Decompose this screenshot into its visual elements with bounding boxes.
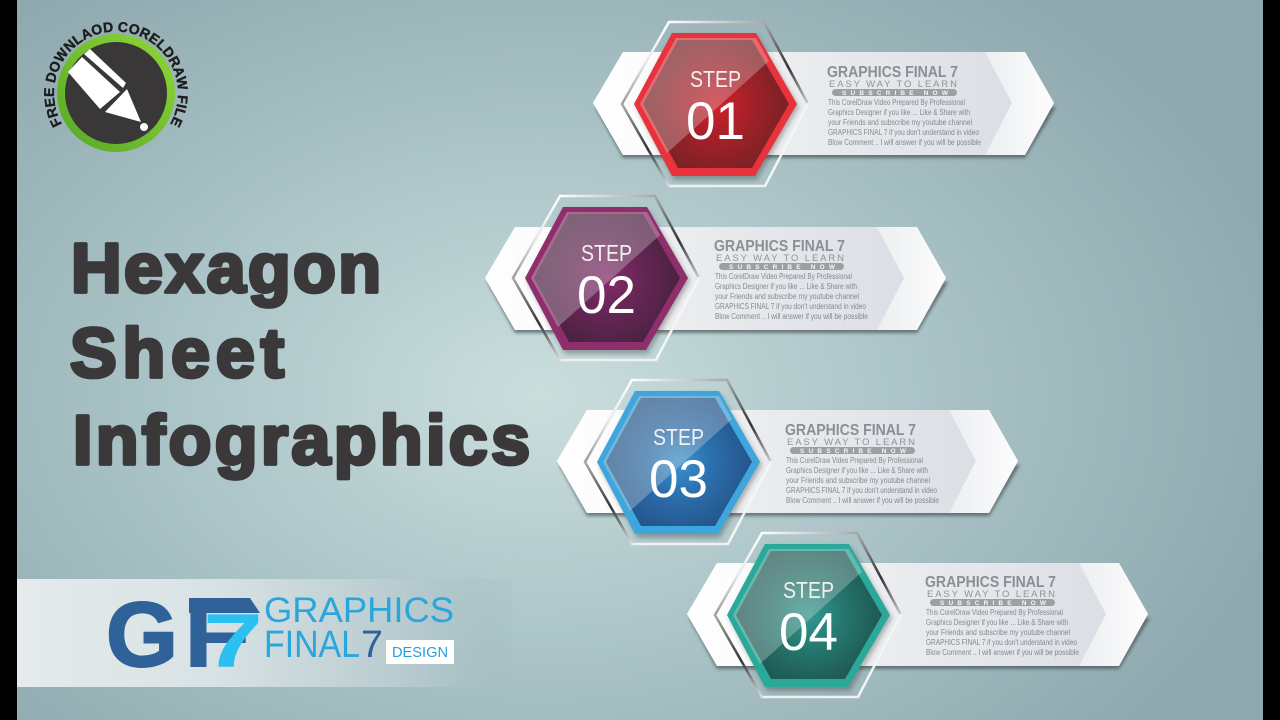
step 2 — [485, 196, 948, 360]
brand name: FINAL — [264, 624, 360, 666]
ribbon text: your Friends and subscribe my youtube channel — [926, 628, 1070, 637]
curved caption: FREE DOWNLAOD CORELDRAW FILE — [44, 22, 188, 128]
ribbon text — [827, 64, 981, 147]
title: Infographics — [73, 401, 530, 479]
ribbon text: SUBSCRIBE NOW — [800, 448, 907, 455]
ribbon text: Blow Comment .. I will answer if you will be possible — [715, 312, 868, 321]
brand name: 7 — [361, 624, 383, 666]
ribbon text: Graphics Designer if you like ... Like & Share with — [828, 108, 970, 117]
ribbon text: GRAPHICS FINAL 7 — [827, 64, 958, 81]
ribbon text: Graphics Designer if you like ... Like & Share with — [715, 282, 857, 291]
design tag — [386, 640, 454, 664]
step label: STEP — [783, 577, 834, 603]
ribbon text: GRAPHICS FINAL 7 if you don't understand in video — [926, 638, 1078, 647]
hexagon outline — [513, 196, 699, 360]
design tag: DESIGN — [392, 644, 448, 661]
ribbon text: This CorelDraw Video Prepared By Professional — [828, 98, 965, 107]
ribbon text: GRAPHICS FINAL 7 if you don't understand in video — [715, 302, 867, 311]
hexagon outline — [622, 22, 808, 186]
ribbon text: Graphics Designer if you like ... Like & Share with — [786, 466, 928, 475]
step 1 — [593, 22, 1056, 186]
ribbon text: Blow Comment .. I will answer if you will be possible — [828, 138, 981, 147]
ribbon text: your Friends and subscribe my youtube channel — [715, 292, 859, 301]
ribbon — [485, 227, 948, 333]
hexagon outline — [715, 533, 901, 697]
step label: 03 — [649, 450, 708, 509]
logo badge — [44, 22, 188, 152]
hexagon — [634, 33, 799, 180]
hexagon outline — [585, 380, 771, 544]
icon: pen nib — [68, 49, 148, 131]
ribbon text — [785, 422, 939, 505]
ribbon text: Blow Comment .. I will answer if you will be possible — [786, 496, 939, 505]
step label: STEP — [690, 66, 741, 92]
ribbon text: GRAPHICS FINAL 7 — [925, 574, 1056, 591]
ribbon — [593, 52, 1056, 158]
brand name: GRAPHICS — [264, 591, 454, 630]
brand mark: GF7 — [106, 582, 263, 688]
ribbon text: GRAPHICS FINAL 7 — [785, 422, 916, 439]
step label — [686, 66, 745, 151]
ribbon text: SUBSCRIBE NOW — [729, 264, 836, 271]
ribbon text: your Friends and subscribe my youtube channel — [828, 118, 972, 127]
step 4 — [687, 533, 1150, 697]
ribbon text: Blow Comment .. I will answer if you will be possible — [926, 648, 1079, 657]
ribbon text: This CorelDraw Video Prepared By Professional — [926, 608, 1063, 617]
brand mark: GF7: F — [183, 582, 251, 688]
brand mark: GF7: 7 — [203, 599, 263, 684]
ribbon text: Graphics Designer if you like ... Like & Share with — [926, 618, 1068, 627]
brand name — [264, 591, 454, 666]
step label: 01 — [686, 92, 745, 151]
ribbon text: your Friends and subscribe my youtube channel — [786, 476, 930, 485]
ribbon text: SUBSCRIBE NOW — [940, 600, 1047, 607]
ribbon — [687, 563, 1150, 669]
step label: 04 — [779, 603, 838, 662]
step label: STEP — [581, 240, 632, 266]
ribbon text: This CorelDraw Video Prepared By Professional — [715, 272, 852, 281]
ribbon text: EASY WAY TO LEARN — [927, 589, 1055, 600]
ribbon text: This CorelDraw Video Prepared By Professional — [786, 456, 923, 465]
ribbon text: GRAPHICS FINAL 7 — [714, 238, 845, 255]
step label — [779, 577, 838, 662]
ribbon text: GRAPHICS FINAL 7 if you don't understand in video — [828, 128, 980, 137]
hexagon — [525, 207, 690, 354]
title — [70, 229, 530, 479]
ribbon text: EASY WAY TO LEARN — [716, 253, 844, 264]
step label: STEP — [653, 424, 704, 450]
step label — [577, 240, 636, 325]
ribbon — [557, 410, 1020, 516]
ribbon text: EASY WAY TO LEARN — [787, 437, 915, 448]
title: Sheet — [70, 314, 284, 392]
step 3 — [557, 380, 1020, 544]
step label: 02 — [577, 266, 636, 325]
hexagon — [727, 544, 892, 691]
ribbon text: GRAPHICS FINAL 7 if you don't understand in video — [786, 486, 938, 495]
logo band — [17, 579, 512, 688]
ribbon text: SUBSCRIBE NOW — [842, 90, 949, 97]
ribbon text — [925, 574, 1079, 657]
hexagon — [597, 391, 762, 538]
title: Hexagon — [71, 229, 381, 307]
step label — [649, 424, 708, 509]
ribbon text — [714, 238, 868, 321]
ribbon text: EASY WAY TO LEARN — [829, 79, 957, 90]
brand mark: GF7: G — [106, 584, 178, 686]
